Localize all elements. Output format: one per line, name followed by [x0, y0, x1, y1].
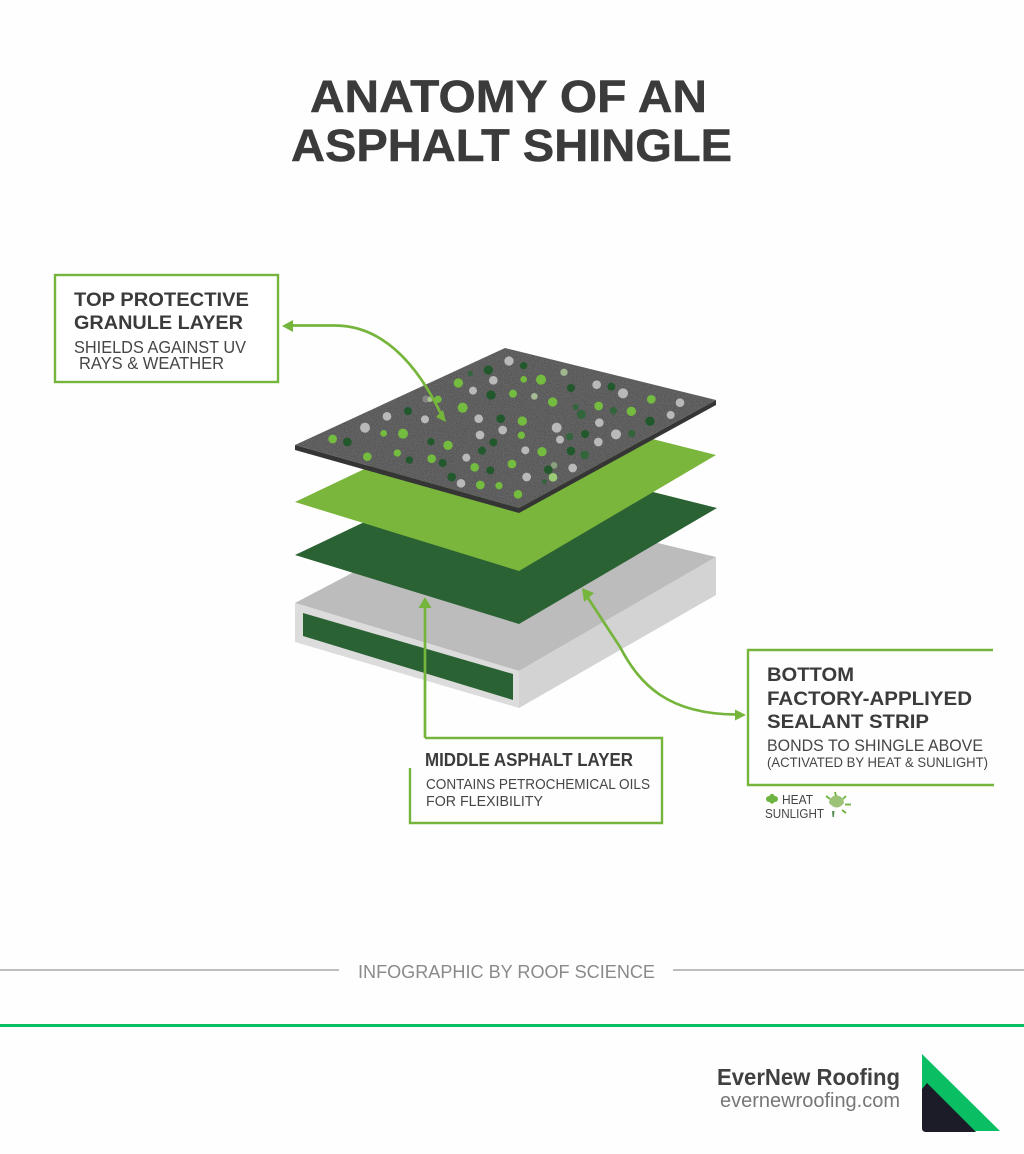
- heat and sunlight labels: HEAT: [782, 792, 813, 807]
- top granule layer: [295, 348, 716, 513]
- dark green asphalt layer: [295, 455, 717, 624]
- icon: heat: [766, 794, 778, 804]
- brand name and url: EverNew Roofing: [717, 1064, 900, 1090]
- heat and sunlight legend: [765, 792, 851, 821]
- brand name and url: [717, 1064, 900, 1112]
- callout: bottom factory-applied sealant strip: FACTORY-APPLIYED: [767, 688, 972, 710]
- arrow: bottom sealant strip: [582, 588, 746, 720]
- callout: bottom factory-applied sealant strip: SEALANT STRIP: [767, 711, 929, 733]
- callout: middle asphalt layer: [410, 738, 662, 823]
- callout: top protective granule layer: TOP PROTECTIVE: [74, 289, 249, 311]
- arrow: top granule layer: [282, 320, 446, 422]
- heat and sunlight labels: SUNLIGHT: [765, 806, 824, 821]
- callout: bottom factory-applied sealant strip: (ACTIVATED BY HEAT & SUNLIGHT): [767, 754, 988, 770]
- granules: [329, 357, 684, 498]
- footer green rule: [0, 1024, 1024, 1027]
- title: [291, 71, 732, 171]
- title: ANATOMY OF AN: [310, 71, 707, 122]
- callout: bottom factory-applied sealant strip: BONDS TO SHINGLE ABOVE: [767, 737, 983, 755]
- arrow: middle asphalt layer: [418, 597, 432, 738]
- callout: top protective granule layer: GRANULE LAYER: [74, 312, 243, 334]
- heat and sunlight labels: [765, 792, 824, 821]
- callout: middle asphalt layer: CONTAINS PETROCHEMICAL OILS: [426, 776, 650, 793]
- title: ASPHALT SHINGLE: [291, 120, 732, 171]
- callout: top protective granule layer: [55, 275, 278, 382]
- callout: top protective granule layer: SHIELDS AGAINST UV: [74, 337, 246, 357]
- icon: sun: [826, 792, 851, 817]
- shingle layer stack diagram: [295, 348, 717, 708]
- bottom grey sealant block: [295, 502, 716, 708]
- callout: top protective granule layer: RAYS & WEATHER: [79, 353, 224, 373]
- callout: bottom factory-applied sealant strip: BOTTOM: [767, 664, 854, 686]
- footer credit divider: INFOGRAPHIC BY ROOF SCIENCE: [358, 962, 655, 982]
- callout: middle asphalt layer: MIDDLE ASPHALT LAYER: [425, 750, 633, 770]
- brand name and url: evernewroofing.com: [720, 1089, 900, 1112]
- callout: bottom factory-applied sealant strip: [748, 650, 994, 785]
- callout: middle asphalt layer: FOR FLEXIBILITY: [426, 793, 543, 810]
- light green layer: [295, 402, 716, 571]
- icon: EverNew logo: [922, 1054, 1000, 1132]
